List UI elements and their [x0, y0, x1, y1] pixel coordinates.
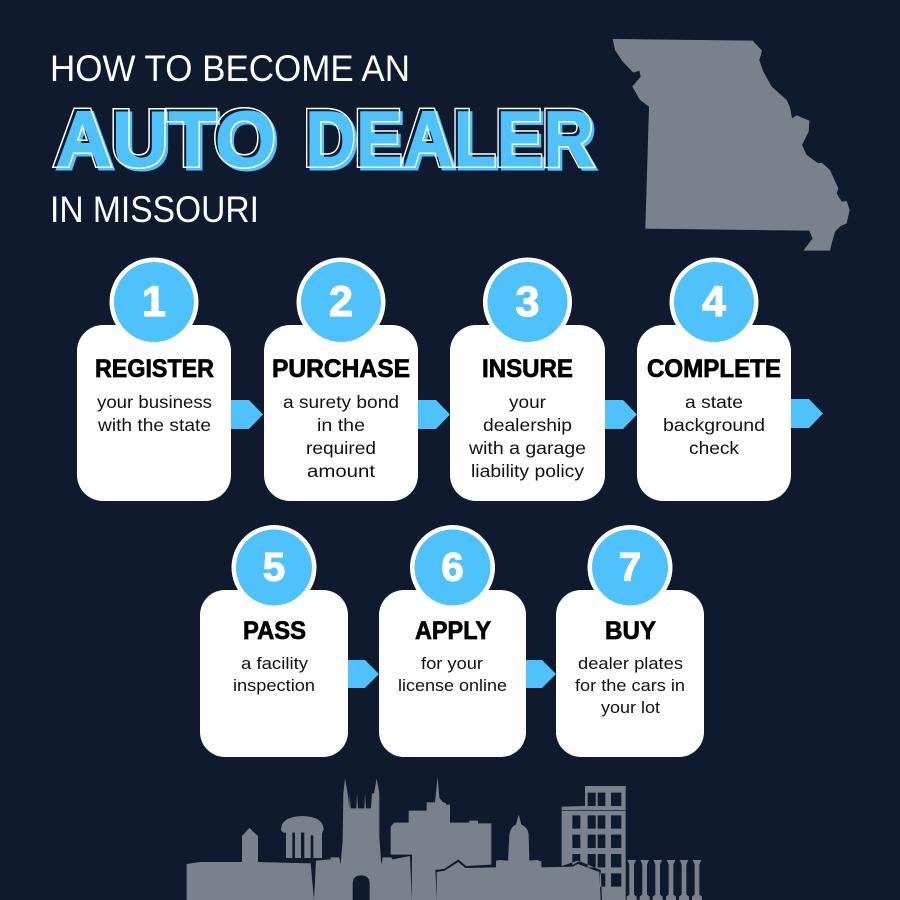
step 2: purchase: PURCHASE [272, 356, 410, 383]
title line: how to become an: HOW TO BECOME AN [50, 47, 410, 89]
step 4: complete: COMPLETE [647, 356, 781, 383]
step 6: apply: 6 [441, 546, 464, 590]
step 3: insure: with a garage [468, 438, 586, 458]
step 1: register: your business [97, 392, 212, 412]
title line: in missouri: IN MISSOURI [50, 188, 259, 230]
arrow: step 6 to 7 [526, 660, 556, 688]
step 6: apply [379, 525, 526, 757]
step 1: register: REGISTER [95, 356, 214, 383]
title line: auto dealer: AUTO [57, 97, 278, 185]
arrow: step 2 to 3 [418, 400, 450, 429]
step 1: register: 1 [142, 278, 166, 326]
step 6: apply: license online [398, 677, 507, 695]
step 2: purchase: required [306, 438, 376, 458]
step 3: insure: your [509, 392, 546, 412]
step 7: buy: your lot [601, 699, 660, 717]
step 4: complete: background [663, 415, 765, 435]
arrow: step 4 onward [791, 399, 823, 428]
step 2: purchase: amount [307, 461, 375, 481]
step 2: purchase: a surety bond [283, 392, 399, 412]
step 5: pass: inspection [233, 677, 315, 695]
step 3: insure: 3 [516, 278, 539, 326]
step 6: apply: for your [421, 655, 484, 673]
step 3: insure: dealership [483, 415, 572, 435]
step 7: buy: BUY [605, 618, 657, 645]
step 1: register [77, 258, 231, 501]
step 7: buy: for the cars in [575, 677, 685, 695]
step 3: insure: liability policy [471, 461, 584, 481]
step 2: purchase: 2 [329, 278, 353, 326]
step 5: pass: PASS [243, 618, 306, 645]
map: Missouri silhouette [613, 39, 850, 251]
step 5: pass: 5 [263, 546, 285, 590]
step 5: pass [200, 525, 348, 757]
skyline: city silhouette [187, 777, 702, 900]
step 3: insure [450, 258, 605, 501]
step 4: complete: 4 [702, 278, 726, 326]
step 4: complete [637, 258, 791, 501]
step 7: buy [556, 525, 704, 757]
title line: auto dealer [52, 107, 599, 172]
title [52, 55, 599, 222]
step 7: buy: 7 [619, 546, 641, 590]
step 2: purchase: in the [317, 415, 365, 435]
step 5: pass: a facility [241, 655, 309, 673]
step 3: insure: INSURE [482, 356, 573, 383]
step 1: register: with the state [97, 415, 211, 435]
step 2: purchase [264, 258, 418, 501]
step 4: complete: check [689, 438, 739, 458]
step 6: apply: APPLY [415, 618, 492, 645]
step 4: complete: a state [685, 392, 743, 412]
arrow: step 5 to 6 [348, 660, 379, 688]
arrow: step 1 to 2 [231, 400, 263, 429]
arrow: step 3 to 4 [605, 400, 637, 429]
step 7: buy: dealer plates [578, 655, 683, 673]
title line: auto dealer: DEALER [307, 97, 596, 185]
